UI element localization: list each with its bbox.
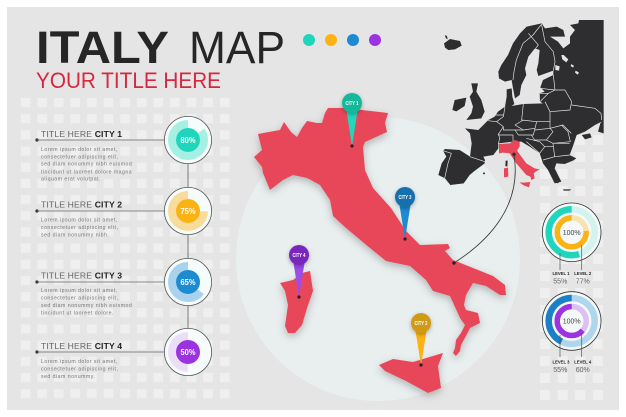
map pin: city 2: CITY 2 [414, 321, 428, 327]
legend colour dots [303, 34, 381, 46]
row: city 2: sed diam nonummy nibh. [41, 233, 109, 239]
map pin: city 1 [342, 93, 362, 148]
gauge: 50%: 50% [180, 347, 196, 357]
row: city 1 [35, 116, 212, 183]
chart: levels 1 and 2: 77% [576, 278, 590, 286]
large circle behind the map [236, 117, 520, 401]
row: city 1: tincidunt ut laoreet dolore magna [41, 169, 132, 175]
row: city 4 [35, 328, 212, 380]
chart: levels 3 and 4 [542, 292, 601, 374]
row: city 3: tincidunt ut laoreet dolore. [41, 311, 114, 317]
map pin: city 2 [411, 313, 431, 367]
subtitle: YOUR TITLE HERE [36, 68, 221, 93]
gauge: 50% [164, 328, 212, 376]
map of Europe [438, 20, 604, 191]
row: city 4: Lorem ipsum dolor sit amet, [41, 359, 118, 365]
chart: levels 3 and 4: 100% [563, 318, 581, 326]
chart: levels 3 and 4: LEVEL 4 [574, 360, 592, 364]
row: city 1: sed diam nonummy nibh euismod [41, 162, 132, 168]
title: MAP [189, 22, 285, 73]
chart: levels 1 and 2: LEVEL 2 [574, 271, 592, 276]
chart: levels 3 and 4: 55% [553, 367, 567, 374]
point marker on large map [452, 261, 456, 265]
Sicily [379, 353, 443, 393]
chart: levels 1 and 2 [542, 203, 601, 286]
row: city 1: Lorem ipsum dolor sit amet, [41, 147, 118, 153]
Sardinia [280, 271, 313, 333]
row: city 4: consectetuer adipiscing elit, [41, 367, 118, 373]
callout line from small Italy to large map [454, 155, 515, 263]
row: city 3: sed diam nonummy nibh euismod [41, 303, 132, 309]
chart: levels 1 and 2: LEVEL 1 [552, 271, 570, 276]
Ireland [452, 98, 466, 111]
row: city 2 [35, 187, 212, 239]
row: city 1: TITLE HERE CITY 1 [41, 129, 122, 139]
map pin: city 3 [395, 187, 415, 241]
row: city 3: TITLE HERE CITY 3 [41, 271, 122, 281]
title [36, 22, 285, 73]
row: city 3: Lorem ipsum dolor sit amet, [41, 288, 118, 294]
row: city 3: consectetuer adipiscing elit, [41, 296, 118, 302]
small Italy highlighted [499, 140, 540, 187]
chart: levels 1 and 2: 100% [563, 230, 581, 237]
row: city 3 [35, 258, 212, 317]
row: city 1: consectetuer adipiscing elit, [41, 154, 118, 160]
map pin: city 1: CITY 1 [346, 101, 359, 107]
gauge: 75%: 75% [180, 206, 196, 216]
chart: levels 3 and 4: LEVEL 3 [552, 360, 570, 364]
row: city 4: TITLE HERE CITY 4 [41, 341, 122, 351]
mainland [254, 108, 506, 356]
row: city 2: Lorem ipsum dolor sit amet, [41, 218, 118, 224]
chart: levels 3 and 4: 60% [576, 367, 590, 374]
Iceland [444, 35, 462, 50]
gauge: 65% [164, 258, 212, 306]
map pin: city 4: CITY 4 [292, 253, 306, 259]
large map of Italy [254, 108, 506, 393]
map pin: city 4 [289, 245, 309, 299]
chart: levels 1 and 2: 55% [553, 278, 567, 286]
map pin: city 3: CITY 3 [398, 195, 412, 201]
row: city 1: aliquam erat volutpat. [41, 177, 101, 183]
gauge: 80% [164, 116, 212, 164]
small islands [483, 161, 571, 191]
row: city 2: consectetuer adipiscing elit, [41, 225, 118, 231]
lakes [555, 55, 579, 75]
timeline connector [187, 140, 189, 352]
country borders [443, 24, 602, 178]
United Kingdom [466, 83, 485, 120]
row: city 2: TITLE HERE CITY 2 [41, 200, 122, 210]
title: ITALY [36, 22, 169, 73]
gauge: 80%: 80% [180, 135, 196, 145]
row: city 4: sed diam nonummy. [41, 374, 95, 380]
gauge: 75% [164, 187, 212, 235]
Crimea [582, 133, 592, 139]
gauge: 65%: 65% [180, 277, 196, 287]
